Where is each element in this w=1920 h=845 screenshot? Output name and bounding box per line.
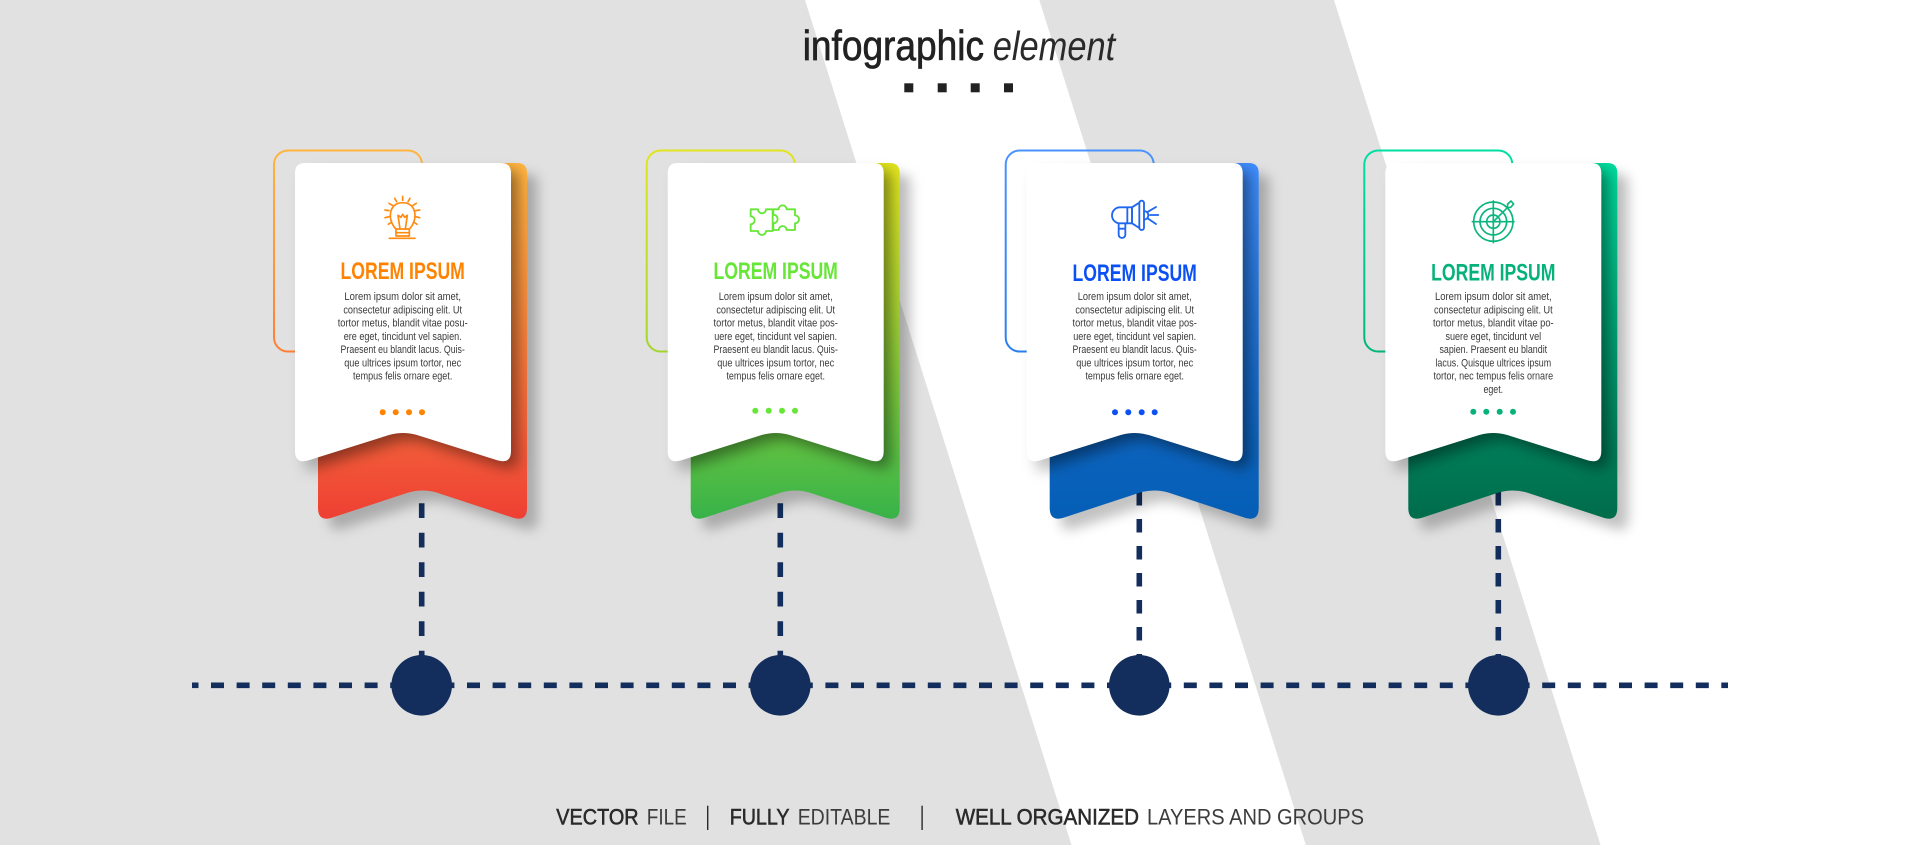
card 1 body text: Praesent eu blandit lacus. Quis- bbox=[341, 344, 465, 356]
card 3 gradient ribbon bbox=[1050, 163, 1259, 519]
card 1 gradient ribbon bbox=[318, 163, 527, 519]
card 2 body text: Praesent eu blandit lacus. Quis- bbox=[714, 344, 838, 356]
panel: card 2 green bbox=[647, 150, 911, 530]
footer tagline: VECTOR bbox=[556, 804, 639, 830]
card 1 body text: consectetur adipiscing elit. Ut bbox=[343, 304, 462, 316]
card 2 heading: LOREM IPSUM bbox=[714, 258, 838, 285]
card 3 body text: tempus felis ornare eget. bbox=[1085, 371, 1184, 383]
card 3 heading: LOREM IPSUM bbox=[1073, 260, 1197, 287]
card 4 body text: consectetur adipiscing elit. Ut bbox=[1434, 304, 1553, 316]
card 1 ribbon shadow bbox=[329, 174, 538, 530]
title bbox=[803, 22, 1117, 69]
connector dashed line 2 bbox=[777, 503, 783, 660]
card 3 body text: consectetur adipiscing elit. Ut bbox=[1075, 304, 1194, 316]
card 1 dots bbox=[380, 409, 425, 415]
card 2 gradient ribbon bbox=[691, 163, 900, 519]
title: infographic bbox=[803, 22, 984, 69]
card 4 body text bbox=[1433, 291, 1554, 396]
card 2 ribbon shadow bbox=[702, 174, 911, 530]
card 2 body text bbox=[714, 291, 838, 383]
card 2 body text: Lorem ipsum dolor sit amet, bbox=[719, 291, 833, 303]
card 4 sheet shadow on background bbox=[1394, 173, 1610, 471]
icon: light bulb bbox=[385, 196, 420, 238]
card 3 body text: que ultrices ipsum tortor, nec bbox=[1076, 357, 1194, 369]
card 4 heading: LOREM IPSUM bbox=[1431, 260, 1555, 287]
footer tagline: WELL ORGANIZED bbox=[956, 804, 1139, 830]
card 4 body text: eget. bbox=[1483, 384, 1503, 396]
card 1 sheet shadow on background bbox=[304, 173, 520, 471]
card 3 outline frame bbox=[1006, 150, 1154, 352]
card 4 body text: lacus. Quisque ultrices ipsum bbox=[1435, 357, 1551, 369]
horizontal dashed timeline bbox=[192, 682, 1728, 688]
footer tagline: EDITABLE bbox=[798, 804, 890, 830]
connector dashed line 3 bbox=[1137, 492, 1142, 660]
footer tagline: FULLY bbox=[730, 804, 790, 830]
card 1 outline frame bbox=[274, 150, 422, 352]
panel: card 3 blue bbox=[1006, 150, 1270, 530]
panel: card 1 orange bbox=[274, 150, 538, 530]
card 2 white sheet bbox=[668, 163, 884, 461]
card 4 gradient ribbon bbox=[1408, 163, 1617, 519]
card 4 body text: suere eget, tincidunt vel bbox=[1445, 331, 1541, 343]
card 2 body text: uere eget, tincidunt vel sapien. bbox=[714, 331, 837, 343]
card 1 body text: Lorem ipsum dolor sit amet, bbox=[344, 291, 461, 303]
card 1 white sheet bbox=[295, 163, 511, 461]
card 4 body text: sapien. Praesent eu blandit bbox=[1439, 344, 1547, 356]
card 1 heading: LOREM IPSUM bbox=[341, 258, 465, 285]
title: element bbox=[993, 23, 1117, 69]
card 3 body text: Praesent eu blandit lacus. Quis- bbox=[1073, 344, 1197, 356]
card 3 body text: uere eget, tincidunt vel sapien. bbox=[1073, 331, 1196, 343]
card 1 body text bbox=[338, 291, 468, 383]
footer tagline bbox=[556, 804, 1364, 830]
card 3 body text bbox=[1073, 291, 1197, 383]
icon: puzzle pieces bbox=[751, 205, 799, 235]
timeline node 4 bbox=[1468, 655, 1529, 716]
card 4 body text: Lorem ipsum dolor sit amet, bbox=[1435, 291, 1552, 303]
timeline node 2 bbox=[750, 655, 811, 716]
timeline node 3 bbox=[1109, 655, 1170, 716]
card 3 sheet shadow on ribbon bbox=[1034, 170, 1250, 468]
card 3 body text: Lorem ipsum dolor sit amet, bbox=[1078, 291, 1192, 303]
card 4 dots bbox=[1470, 409, 1516, 415]
card 2 body text: que ultrices ipsum tortor, nec bbox=[717, 357, 835, 369]
connector dashed line 1 bbox=[419, 503, 425, 660]
card 4 outline frame bbox=[1364, 150, 1512, 352]
card 3 ribbon shadow bbox=[1061, 174, 1270, 530]
card 3 body text: tortor metus, blandit vitae pos- bbox=[1073, 318, 1197, 330]
card 2 outline frame bbox=[647, 150, 795, 352]
card 1 body text: que ultrices ipsum tortor, nec bbox=[344, 357, 462, 369]
card 4 sheet shadow on ribbon bbox=[1392, 170, 1608, 468]
panel: card 4 teal bbox=[1364, 150, 1628, 530]
card 1 sheet shadow on ribbon bbox=[302, 170, 518, 468]
card 1 body text: ere eget, tincidunt vel sapien. bbox=[344, 331, 462, 343]
card 3 sheet shadow on background bbox=[1036, 173, 1252, 471]
card 4 ribbon shadow bbox=[1419, 174, 1628, 530]
card 1 body text: tempus felis ornare eget. bbox=[353, 371, 452, 383]
title square markers bbox=[904, 83, 1013, 92]
connector dashed line 4 bbox=[1496, 492, 1501, 660]
footer tagline: LAYERS AND GROUPS bbox=[1147, 804, 1364, 830]
card 2 body text: consectetur adipiscing elit. Ut bbox=[716, 304, 835, 316]
card 4 body text: tortor metus, blandit vitae po- bbox=[1433, 318, 1554, 330]
card 1 body text: tortor metus, blandit vitae posu- bbox=[338, 318, 468, 330]
icon: megaphone bbox=[1112, 201, 1158, 238]
timeline node 1 bbox=[391, 655, 452, 716]
card 2 sheet shadow on ribbon bbox=[675, 170, 891, 468]
card 2 dots bbox=[752, 408, 798, 414]
card 2 body text: tempus felis ornare eget. bbox=[726, 371, 825, 383]
card 2 body text: tortor metus, blandit vitae pos- bbox=[714, 318, 838, 330]
card 2 sheet shadow on background bbox=[677, 173, 893, 471]
card 3 white sheet bbox=[1027, 163, 1243, 461]
icon: target with arrow bbox=[1472, 201, 1514, 243]
card 4 body text: tortor, nec tempus felis ornare bbox=[1433, 371, 1553, 383]
footer tagline: FILE bbox=[647, 804, 687, 830]
card 4 white sheet bbox=[1385, 163, 1601, 461]
card 3 dots bbox=[1112, 409, 1158, 415]
